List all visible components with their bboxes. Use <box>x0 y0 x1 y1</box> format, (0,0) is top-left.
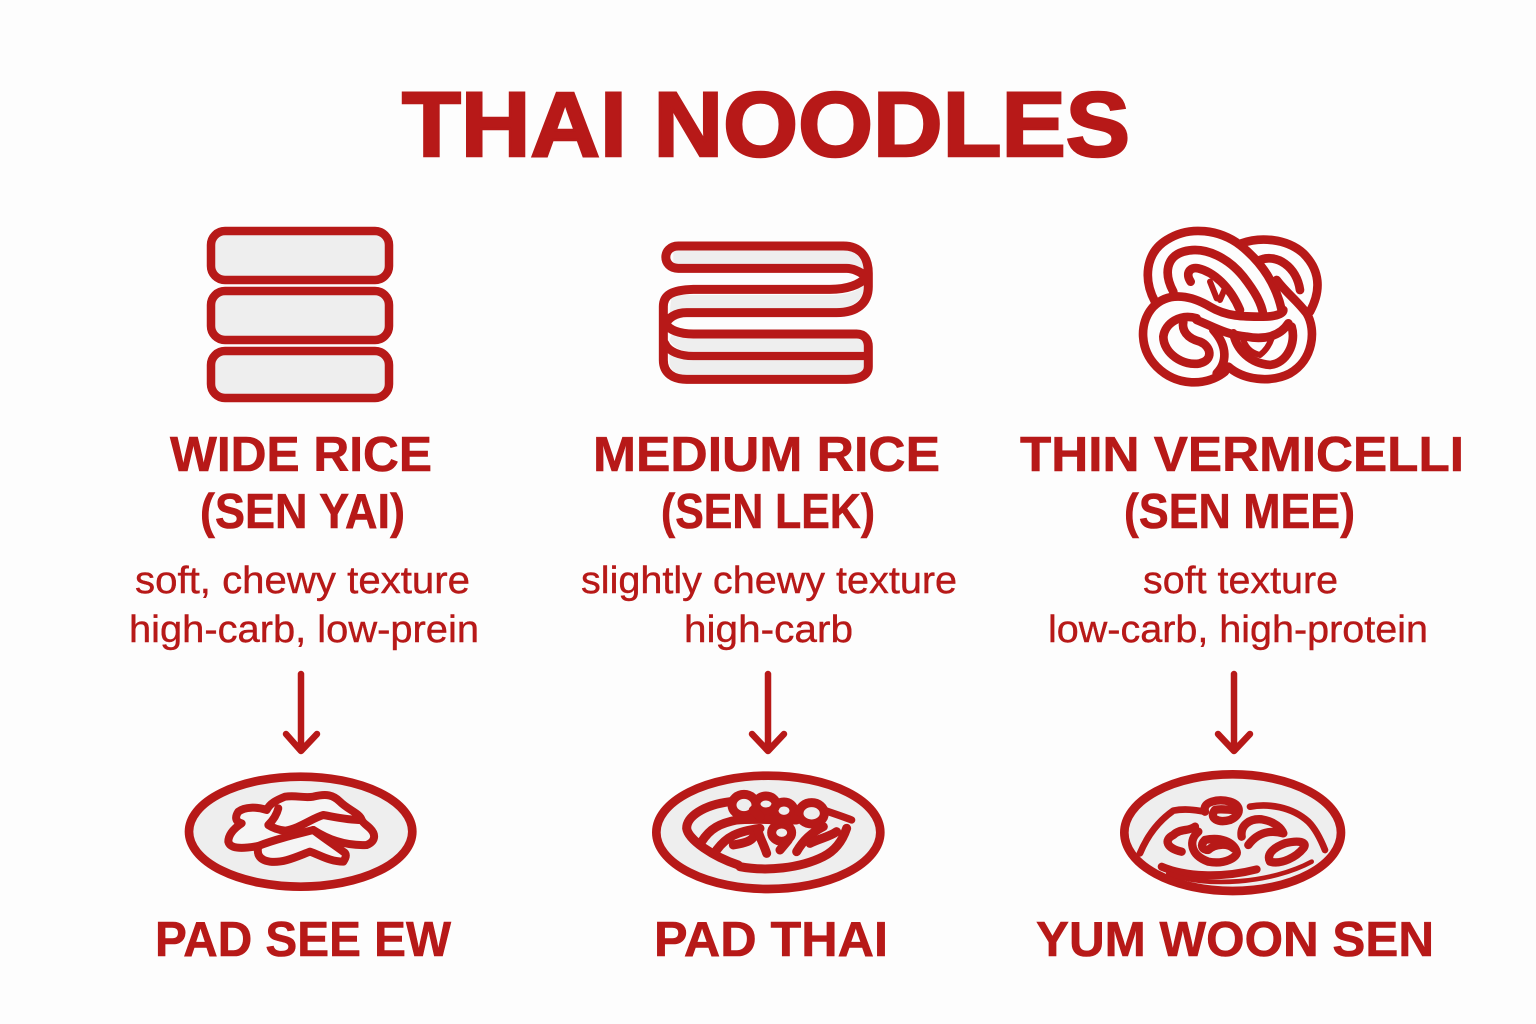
column: thin vermicelli <box>1020 231 1464 967</box>
description: wide rice <box>129 560 479 651</box>
label: pad thai: PAD THAI <box>654 913 888 967</box>
description: wide rice: soft, chewy texture <box>135 560 470 602</box>
label: pad see ew: PAD SEE EW <box>155 913 452 967</box>
heading: wide rice <box>170 428 432 539</box>
description: wide rice: high-carb, low-prein <box>129 609 479 651</box>
description: thin vermicelli: low-carb, high-protein <box>1048 609 1428 651</box>
description: medium rice <box>581 560 957 651</box>
heading: thin vermicelli: THIN VERMICELLI <box>1020 428 1464 482</box>
column: medium rice <box>581 246 957 967</box>
heading: wide rice: WIDE RICE <box>170 428 432 482</box>
title: THAI NOODLES <box>402 74 1130 176</box>
description: medium rice: slightly chewy texture <box>581 560 957 602</box>
description: thin vermicelli <box>1048 560 1428 651</box>
icon: thin vermicelli knot <box>1143 231 1318 382</box>
arrow: thin vermicelli to yum woon sen <box>1218 674 1250 751</box>
heading: thin vermicelli: (SEN MEE) <box>1124 485 1355 539</box>
column: wide rice <box>129 231 479 967</box>
heading: thin vermicelli <box>1020 428 1464 539</box>
icon: yum woon sen bowl <box>1124 774 1341 891</box>
icon: pad see ew plate <box>189 777 412 887</box>
label: yum woon sen: YUM WOON SEN <box>1036 913 1434 967</box>
heading: wide rice: (SEN YAI) <box>200 485 405 539</box>
icon: medium rice folded noodle <box>663 246 868 379</box>
arrow: wide rice to pad see ew <box>286 674 317 751</box>
heading: medium rice <box>593 428 940 539</box>
description: medium rice: high-carb <box>684 609 853 651</box>
arrow: medium rice to pad thai <box>752 674 784 751</box>
icon: pad thai plate <box>656 776 880 889</box>
description: thin vermicelli: soft texture <box>1143 560 1338 602</box>
heading: medium rice: (SEN LEK) <box>661 485 875 539</box>
heading: medium rice: MEDIUM RICE <box>593 428 940 482</box>
icon: wide rice noodle stack <box>211 231 389 398</box>
